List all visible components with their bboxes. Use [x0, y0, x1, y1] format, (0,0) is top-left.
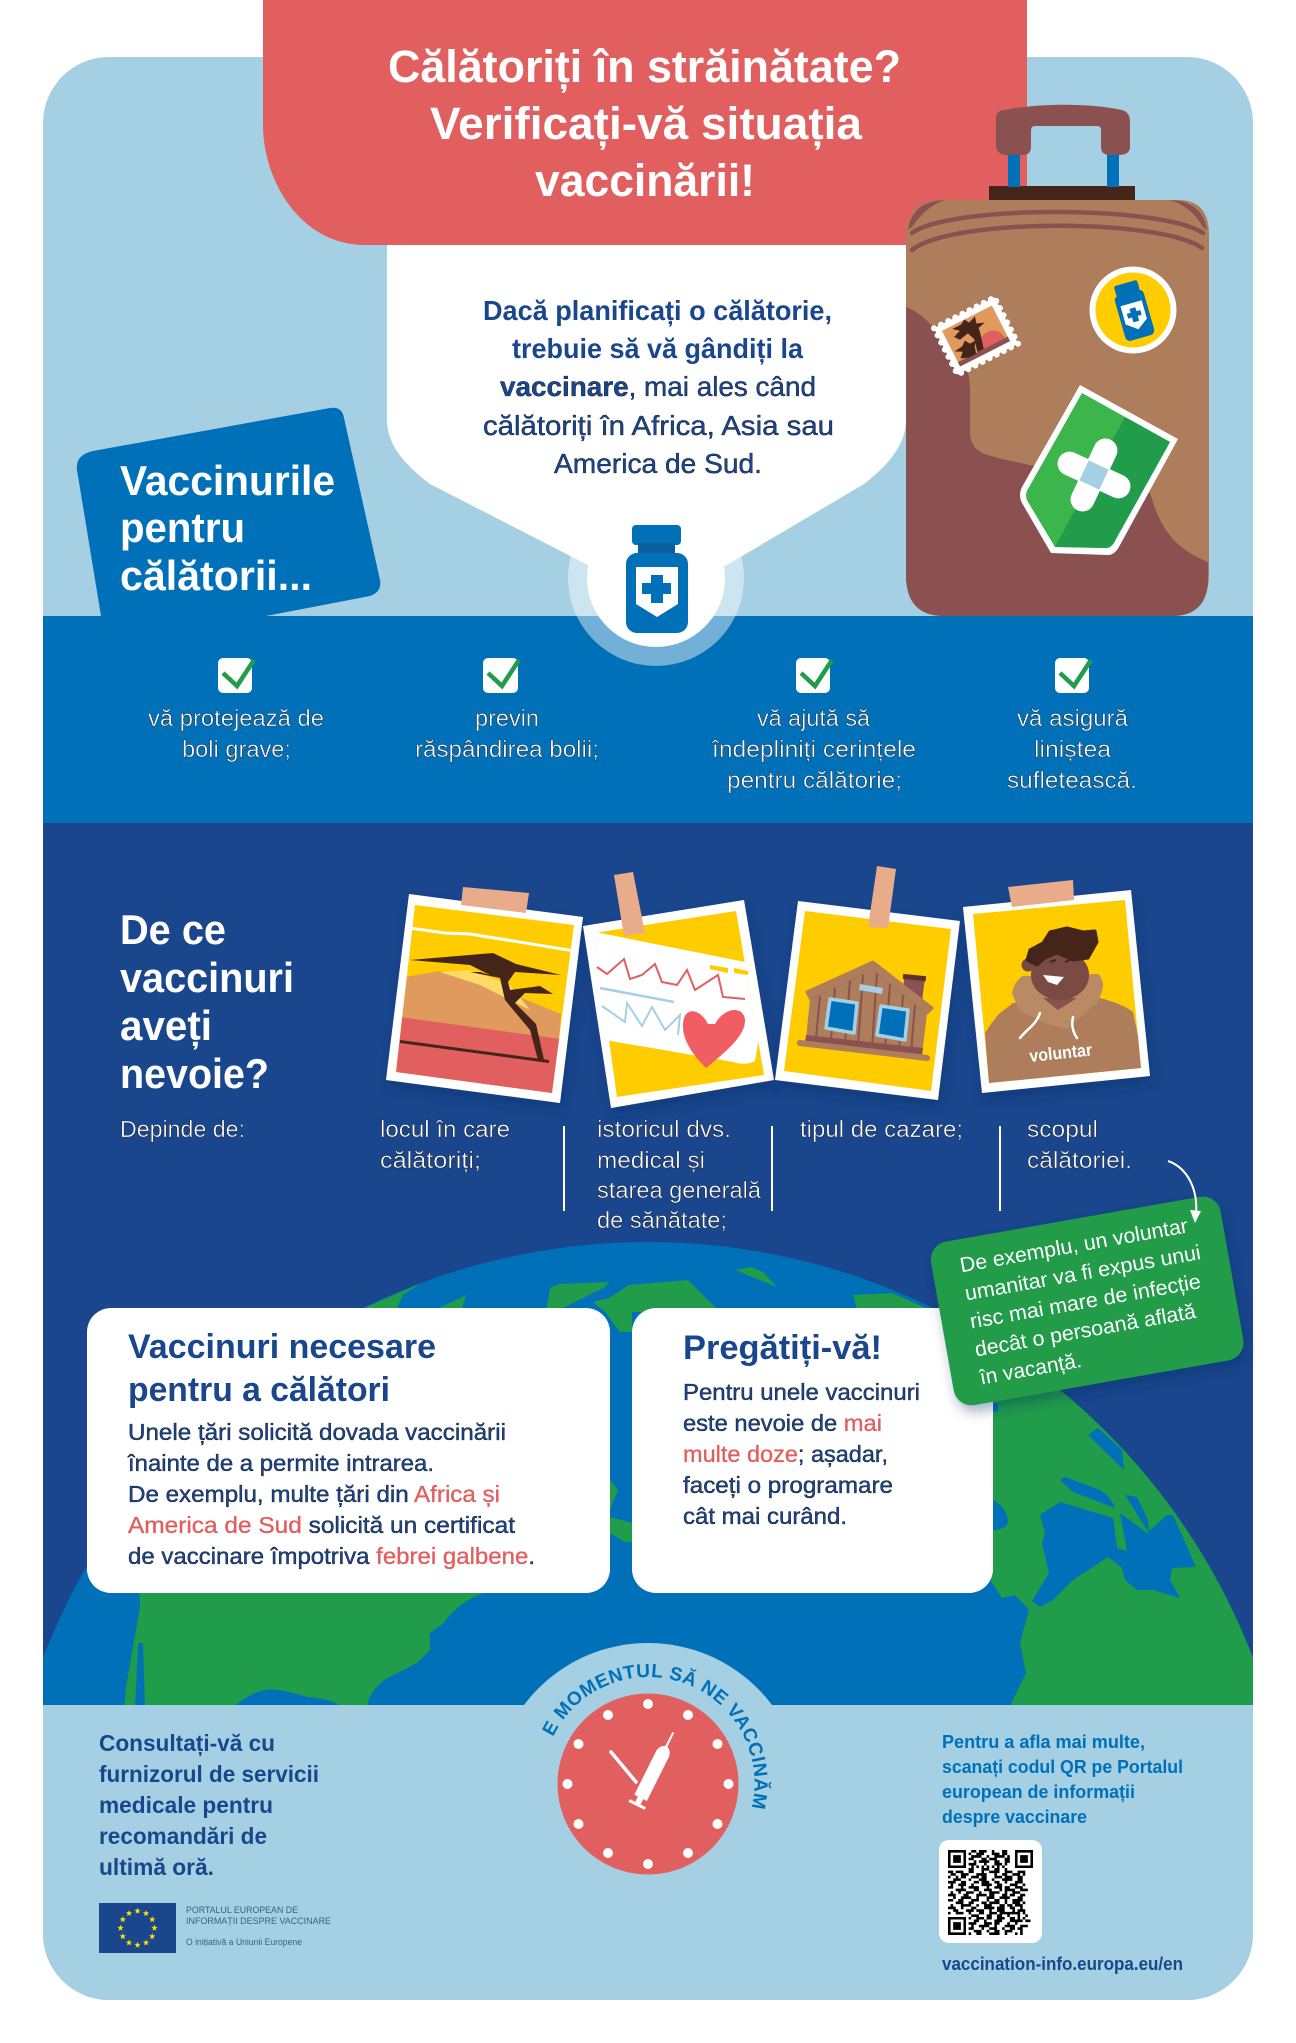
- card: Pregătiți-vă: cât mai curând.: [683, 1503, 847, 1529]
- illustration: suitcase: [906, 105, 1209, 616]
- card: Pregătiți-vă: faceți o programare: [683, 1472, 893, 1498]
- heading: De ce vaccinuri aveți nevoie: [120, 906, 294, 1097]
- text: learn more: european de informații: [942, 1781, 1135, 1802]
- callout: volunteer example: umanitar va fi expus unui: [963, 1241, 1202, 1305]
- item: prevent: [415, 658, 599, 762]
- card: Vaccinuri necesare: pentru a călători: [128, 1371, 390, 1409]
- item: protect: vă protejează de: [148, 705, 324, 731]
- halo ring around bottle: [568, 490, 744, 666]
- text: consult provider: recomandări de: [99, 1823, 267, 1849]
- card: Pregătiți-vă: multe doze; așadar,: [683, 1441, 888, 1467]
- heading: De ce vaccinuri aveți nevoie: nevoie?: [120, 1050, 269, 1097]
- band: light blue footer: [43, 1705, 1253, 2000]
- card: Pregătiți-vă: Pregătiți-vă!: [683, 1329, 882, 1367]
- text: Depinde de: Depinde de:: [120, 1116, 245, 1142]
- photo: volunteer: voluntar: [1028, 1039, 1093, 1066]
- factor: location: călătoriți;: [380, 1147, 481, 1173]
- header: title: Verificați-vă situația: [430, 98, 863, 149]
- callout: volunteer example: risc mai mare de infecție: [968, 1270, 1203, 1333]
- item: protect: boli grave;: [182, 736, 291, 762]
- text: portal credit: PORTALUL EUROPEAN DE: [186, 1905, 298, 1916]
- photo: cabin: [775, 866, 960, 1100]
- white speech bubble with intro text: trebuie să vă gândiți la: [512, 333, 804, 364]
- factor: medical history: medical și: [597, 1147, 705, 1173]
- factor: accommodation: tipul de cazare;: [800, 1116, 963, 1142]
- factor: location: [380, 1116, 510, 1173]
- card: Vaccinuri necesare: Vaccinuri necesare: [128, 1328, 436, 1366]
- factor: purpose: călătoriei.: [1027, 1147, 1132, 1173]
- icon: syringe hand: [629, 1729, 681, 1810]
- text: learn more: scanați codul QR pe Portalul: [942, 1756, 1183, 1777]
- text: learn more: despre vaccinare: [942, 1806, 1087, 1827]
- header: title: vaccinării!: [535, 155, 755, 206]
- logo: EU flag: [99, 1903, 176, 1953]
- text: portal credit: [186, 1905, 331, 1947]
- header: title: Călătoriți în străinătate?: [388, 41, 901, 92]
- card: Vaccinuri necesare: înainte de a permite intrarea.: [127, 1450, 434, 1476]
- card: Pregătiți-vă: este nevoie de mai: [683, 1410, 882, 1436]
- photo: medical chart: [583, 872, 774, 1108]
- item: requirements: [711, 658, 916, 793]
- callout: volunteer example: [928, 1194, 1246, 1408]
- item: prevent: previn: [475, 705, 539, 731]
- factor: location: locul în care: [380, 1116, 510, 1142]
- item: requirements: îndepliniți cerințele: [711, 736, 916, 762]
- tag: Vaccinurile pentru călătorii: [77, 408, 380, 616]
- card: Vaccinuri necesare: De exemplu, multe țări din Africa și: [128, 1481, 500, 1507]
- band: dark blue: [43, 823, 1253, 1705]
- arrow: to callout: [1168, 1161, 1201, 1223]
- white speech bubble with intro text: America de Sud.: [554, 448, 762, 479]
- factor: medical history: istoricul dvs.: [597, 1116, 731, 1142]
- item: requirements: pentru călătorie;: [727, 767, 902, 793]
- text: consult provider: furnizorul de servicii: [99, 1761, 319, 1787]
- card: Vaccinuri necesare: America de Sud solicită un certificat: [128, 1512, 516, 1538]
- clock bump: [524, 1643, 772, 1705]
- tag: Vaccinurile pentru călătorii: pentru: [120, 504, 245, 551]
- icon: vaccine bottle: [626, 525, 688, 633]
- callout: volunteer example: De exemplu, un voluntar: [958, 1215, 1190, 1277]
- text: learn more: [942, 1731, 1183, 1827]
- text: portal credit: INFORMAȚII DESPRE VACCINARE: [186, 1916, 331, 1927]
- text: url: vaccination-info.europa.eu/en: [942, 1953, 1183, 1974]
- band: medium blue: [43, 616, 1253, 823]
- tag: Vaccinurile pentru călătorii: călătorii...: [120, 552, 312, 599]
- tag: Vaccinurile pentru călătorii: Vaccinurile: [120, 457, 335, 504]
- white speech bubble with intro text: Dacă planificați o călătorie,: [483, 295, 832, 326]
- card: Pregătiți-vă: [632, 1308, 993, 1593]
- sticker: bandage shield: [1020, 385, 1178, 555]
- item: peace of mind: sufletească.: [1007, 767, 1137, 793]
- item: peace of mind: [1007, 658, 1137, 793]
- globe: [0, 1240, 1296, 1710]
- factors text: [380, 1116, 1132, 1233]
- callout: volunteer example: în vacanță.: [977, 1349, 1083, 1390]
- photo: savanna: [386, 887, 583, 1103]
- card: Pregătiți-vă: Pentru unele vaccinuri: [683, 1379, 920, 1405]
- text: learn more: Pentru a afla mai multe,: [942, 1731, 1145, 1752]
- callout: volunteer example: decât o persoană aflată: [973, 1300, 1198, 1362]
- clock badge: [542, 1664, 772, 1874]
- item: peace of mind: liniștea: [1034, 736, 1111, 762]
- white speech bubble with intro text: vaccinare, mai ales când: [500, 371, 816, 402]
- card: Vaccinuri necesare: [87, 1308, 610, 1593]
- clock face: [558, 1694, 738, 1874]
- checklist: [148, 658, 1137, 793]
- text: consult provider: Consultați-vă cu: [99, 1730, 275, 1757]
- text: portal credit: O inițiativă a Uniunii Europene: [186, 1937, 302, 1947]
- factor: medical history: starea generală: [597, 1177, 761, 1203]
- curved slogan: E MOMENTUL SĂ NE VACCINĂM: [542, 1664, 772, 1809]
- heading: De ce vaccinuri aveți nevoie: aveți: [120, 1002, 212, 1050]
- item: peace of mind: vă asigură: [1017, 705, 1128, 731]
- factor: medical history: [597, 1116, 761, 1233]
- text: consult provider: medicale pentru: [99, 1792, 273, 1818]
- white speech bubble with intro text: călătoriți în Africa, Asia sau: [483, 410, 834, 441]
- card: Vaccinuri necesare: Unele țări solicită dovada vaccinării: [128, 1419, 506, 1445]
- factor: medical history: de sănătate;: [597, 1207, 727, 1233]
- item: protect: [148, 658, 324, 762]
- white speech bubble with intro text: [387, 245, 906, 647]
- text: consult provider: ultimă oră.: [99, 1854, 214, 1880]
- heading: De ce vaccinuri aveți nevoie: vaccinuri: [120, 954, 294, 1001]
- text: consult provider: [99, 1730, 319, 1880]
- item: prevent: răspândirea bolii;: [415, 736, 599, 762]
- sticker: vaccine bottle: [1090, 266, 1176, 354]
- item: requirements: vă ajută să: [757, 705, 870, 731]
- card: Vaccinuri necesare: de vaccinare împotriva febrei galbene .: [128, 1543, 535, 1569]
- QR code: [939, 1840, 1042, 1943]
- sticker: stamp with palm: [934, 297, 1018, 375]
- photo: volunteer: [963, 880, 1150, 1093]
- factor: purpose: scopul: [1027, 1116, 1098, 1142]
- header: title: [263, 0, 1027, 245]
- heading: De ce vaccinuri aveți nevoie: De ce: [120, 906, 226, 953]
- factor: purpose: [1027, 1116, 1132, 1173]
